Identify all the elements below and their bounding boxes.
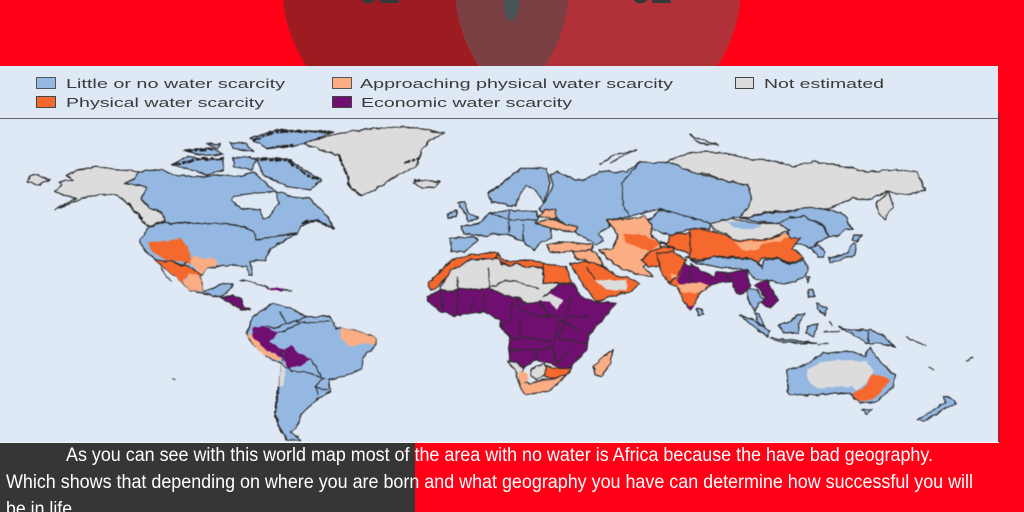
legend item: physical water scarcity bbox=[36, 95, 265, 110]
dark box behind caption bbox=[0, 443, 415, 512]
caption text: As you can see with this world map most of the area with no water is Africa because the have bad geography. bbox=[66, 445, 933, 466]
legend item: little or no water scarcity bbox=[36, 76, 286, 91]
white rule below map bbox=[0, 442, 999, 443]
legend item: not estimated bbox=[736, 76, 884, 91]
map region: eastern Asia and Oceania bbox=[667, 135, 973, 422]
legend item: economic water scarcity bbox=[332, 95, 573, 110]
legend bbox=[36, 76, 884, 110]
map panel background bbox=[0, 66, 998, 442]
legend item: approaching physical water scarcity: Approaching physical water scarcity bbox=[360, 76, 674, 91]
world map bbox=[27, 127, 973, 440]
map region: Europe, Africa and western Asia bbox=[413, 150, 752, 395]
legend item: physical water scarcity: Physical water scarcity bbox=[66, 95, 265, 110]
panel right edge bbox=[998, 113, 1000, 442]
venn diagram circles clipped at top bbox=[282, 0, 741, 130]
legend item: not estimated: Not estimated bbox=[764, 76, 884, 91]
legend item: economic water scarcity: Economic water scarcity bbox=[361, 95, 573, 110]
caption text: Which shows that depending on where you are born and what geography you have can determine how successful you will bbox=[6, 472, 973, 493]
legend divider bbox=[0, 118, 998, 119]
legend item: approaching physical water scarcity bbox=[332, 76, 674, 91]
caption text bbox=[6, 445, 973, 512]
map region: Americas bbox=[27, 127, 445, 440]
legend item: little or no water scarcity: Little or no water scarcity bbox=[66, 76, 286, 91]
